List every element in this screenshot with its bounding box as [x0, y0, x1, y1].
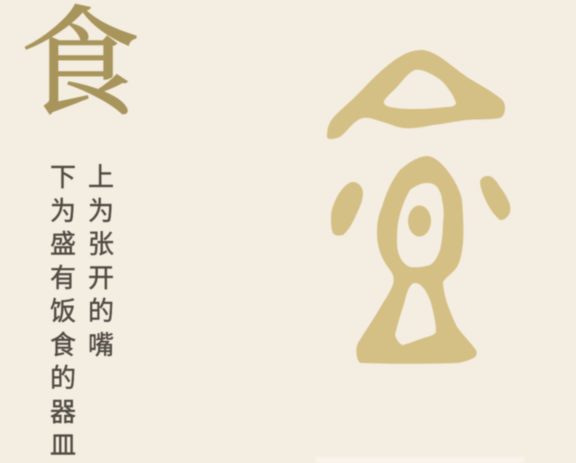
text block: left column, lower part explanation: 的: [50, 363, 76, 393]
caption: cropped white subtitle at bottom edge: [316, 457, 524, 463]
text block: right column, upper part explanation: 为: [88, 196, 114, 226]
text block: right column, upper part explanation: 上: [88, 162, 114, 192]
text block: left column, lower part explanation: 饭: [50, 296, 76, 326]
text block: left column, lower part explanation: 下: [50, 162, 76, 192]
text block: left column, lower part explanation: 为: [50, 196, 76, 226]
text block: left column, lower part explanation: [50, 162, 76, 460]
text block: right column, upper part explanation: [88, 162, 114, 360]
text block: left column, lower part explanation: 皿: [50, 430, 76, 460]
text block: right column, upper part explanation: 嘴: [88, 330, 114, 360]
icon: grain dot inside vessel: [408, 206, 431, 236]
icon: left side grain: [331, 182, 363, 236]
icon: open mouth roof shape: [327, 50, 505, 139]
icon: right side grain: [480, 176, 510, 220]
text block: left column, lower part explanation: 食: [50, 330, 76, 360]
text block: right column, upper part explanation: 张: [88, 229, 114, 259]
text block: left column, lower part explanation: 盛: [50, 229, 76, 259]
title: modern character for food: 食: [20, 0, 140, 131]
text block: right column, upper part explanation: 的: [88, 296, 114, 326]
text block: right column, upper part explanation: 开: [88, 262, 114, 292]
text block: left column, lower part explanation: 有: [50, 262, 76, 292]
icon: vessel body with pedestal: [356, 156, 477, 364]
text block: left column, lower part explanation: 器: [50, 396, 76, 426]
